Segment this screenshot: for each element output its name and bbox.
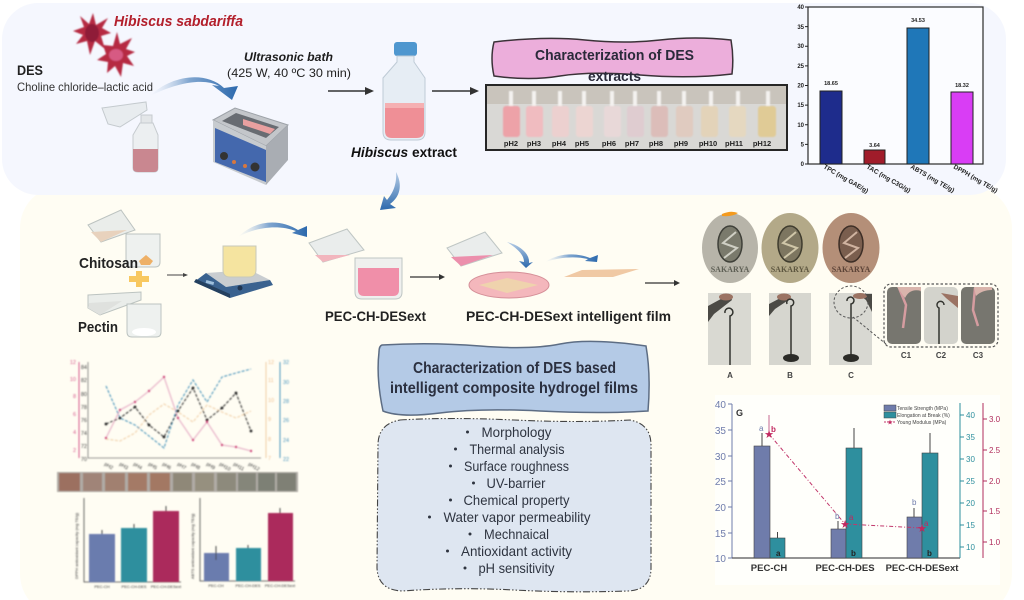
series: blue	[106, 369, 251, 448]
line chart: colour parameters across pH: pH9	[205, 462, 216, 471]
label: A: A	[727, 371, 733, 380]
bar chart: TPC, TAC, ABTS and DPPH: 35	[797, 25, 805, 31]
photo: extract vials at pH 2 to 12: pH3	[527, 139, 541, 148]
bar chart: mechanical properties: ★	[764, 429, 774, 441]
photo: extract vials at pH 2 to 12: pH10	[699, 139, 717, 148]
significance letters: a	[849, 513, 854, 522]
line chart: colour parameters across pH: 12	[70, 360, 76, 366]
bar chart: TPC, TAC, ABTS and DPPH: ABTS (mg TE/g)	[909, 164, 955, 194]
bar chart: mechanical properties: 40	[966, 411, 975, 420]
significance letters: a	[776, 549, 781, 558]
bar chart: mechanical properties: 20	[966, 499, 975, 508]
bar: TAC	[864, 150, 885, 164]
arrow: bath to extract	[328, 87, 374, 95]
icon: pouring into petri dish	[447, 232, 549, 298]
line chart: colour parameters across pH: 2	[73, 448, 76, 454]
bar chart: mechanical properties: 15	[715, 529, 726, 540]
bar chart: mechanical properties: ★	[840, 519, 850, 531]
film: PEC-CH-DES	[762, 213, 818, 283]
bar chart: TPC, TAC, ABTS and DPPH: 15	[797, 103, 805, 109]
bar chart: mechanical properties: 1.0	[989, 538, 1001, 547]
bar chart: TPC, TAC, ABTS and DPPH: 10	[797, 123, 805, 129]
arrow: DES to ultrasonic bath	[150, 77, 238, 100]
test photo A	[708, 293, 751, 365]
legend: ★	[887, 418, 893, 426]
bar: PEC-CH-DESext	[153, 511, 179, 582]
arrow: stirrer to pink beaker	[238, 223, 307, 237]
bar chart: mechanical properties	[715, 395, 1001, 585]
icon: pouring extract into beaker	[309, 229, 402, 299]
line chart: colour parameters across pH: pH7	[176, 462, 187, 471]
photo: extract vials at pH 2 to 12	[486, 85, 787, 150]
bar chart: mechanical properties: 10	[715, 554, 726, 565]
list item: chemical property: Chemical property	[464, 492, 570, 508]
label: C: C	[848, 371, 854, 380]
x-axis labels: PEC-CH-DES	[815, 563, 875, 574]
heading: characterization of DES based films	[378, 341, 649, 415]
line chart: colour parameters across pH: 26	[283, 418, 289, 424]
legend: Young Modulus (MPa)	[897, 420, 947, 426]
line chart: colour parameters across pH: pH6	[161, 462, 172, 471]
bar chart: DPPH antioxidant capacity: PEC-CH-DESext	[151, 584, 182, 589]
icon: pectin beakers	[88, 292, 161, 337]
panel letter G: G	[736, 408, 743, 418]
line chart: colour parameters across pH: 76	[81, 418, 87, 424]
label: C3: C3	[973, 351, 984, 360]
bar: PEC-CH	[89, 534, 115, 582]
line chart: colour parameters across pH: 84	[81, 365, 87, 371]
bar chart: ABTS antioxidant capacity	[190, 498, 296, 588]
bar chart: mechanical properties: 20	[715, 503, 726, 514]
heading: characterization of DES extracts: extracts	[588, 68, 641, 84]
film: PEC-CH: SAKARYA	[711, 265, 749, 274]
bar chart: mechanical properties: 25	[966, 477, 975, 486]
icon: hibiscus extract bottle	[383, 42, 425, 140]
bar chart: DPPH antioxidant capacity	[74, 498, 182, 589]
bar chart: TPC, TAC, ABTS and DPPH: 25	[797, 64, 805, 70]
bar chart: mechanical properties: 1.5	[989, 507, 1001, 516]
bar chart: mechanical properties: 2.5	[989, 446, 1001, 455]
bar chart: TPC, TAC, ABTS and DPPH: 5	[801, 142, 805, 148]
significance letters: b	[851, 549, 856, 558]
line chart: colour parameters across pH: 7	[268, 456, 271, 462]
significance letters: a	[759, 424, 764, 433]
list item: UV-barrier: UV-barrier	[486, 475, 546, 491]
line chart: colour parameters across pH: pH11	[232, 462, 245, 473]
photo C3	[961, 287, 995, 344]
arrow: dish to film	[545, 254, 598, 262]
list item: thermal analysis: Thermal analysis	[470, 441, 564, 457]
bar chart: ABTS antioxidant capacity: PEC-CH-DES	[236, 583, 261, 588]
bars: elongation at break	[770, 448, 938, 558]
bars: tensile strength	[754, 446, 922, 558]
icon: chitosan beakers	[88, 210, 160, 267]
line chart: colour parameters across pH: 32	[283, 360, 289, 366]
line chart: colour parameters across pH: 10	[70, 377, 76, 383]
line chart: colour parameters across pH: 12	[268, 360, 274, 366]
line chart: colour parameters across pH: pH5	[147, 462, 158, 471]
significance letters: b	[912, 498, 917, 507]
photo: extract vials at pH 2 to 12: pH7	[625, 139, 639, 148]
legend	[884, 405, 950, 426]
panel: DES extraction	[2, 3, 1006, 195]
x-axis labels: PEC-CH	[751, 563, 787, 574]
bar chart: mechanical properties: 35	[715, 426, 726, 437]
bar chart: TPC, TAC, ABTS and DPPH: 30	[797, 44, 805, 50]
series: black	[106, 388, 251, 437]
list item: morphology: Morphology	[482, 424, 552, 440]
heading: characterization of DES based films: intelligent composite hydrogel films	[390, 380, 638, 397]
bar chart: mechanical properties: 30	[966, 455, 975, 464]
bar chart: mechanical properties: 10	[966, 543, 975, 552]
x-axis labels	[751, 563, 959, 574]
bar chart: DPPH antioxidant capacity: DPPH antioxidant capacity (mg TE/g)	[74, 512, 79, 579]
bar chart: TPC, TAC, ABTS and DPPH: TPC (mg GAE/g)	[822, 164, 869, 195]
photo: extract vials at pH 2 to 12: pH4	[552, 139, 567, 148]
bar: PEC-CH-DES	[236, 548, 261, 581]
line chart: colour parameters across pH: 22	[283, 457, 289, 463]
icon: magnetic stirrer with beaker	[194, 246, 273, 298]
label: ultrasonic conditions: (425 W, 40 ºC 30 min)	[227, 66, 351, 80]
photo: extract vials at pH 2 to 12: pH11	[725, 139, 743, 148]
bar chart: ABTS antioxidant capacity: PEC-CH	[208, 583, 224, 588]
significance letters	[759, 424, 932, 558]
bar chart: mechanical properties: 15	[966, 521, 975, 530]
bar chart: TPC, TAC, ABTS and DPPH: TAC (mg C3G/g)	[865, 164, 912, 195]
bar chart: TPC, TAC, ABTS and DPPH: 18.32	[955, 83, 969, 89]
series: orange	[106, 404, 251, 441]
film: PEC-CH	[702, 212, 758, 283]
bar chart: ABTS antioxidant capacity: PEC-CH-DESext	[265, 583, 296, 588]
label: DES: DES	[17, 62, 43, 78]
label: pectin: Pectin	[78, 319, 118, 336]
photo: extract vials at pH 2 to 12: pH6	[602, 139, 616, 148]
line chart: colour parameters across pH: 10	[268, 398, 274, 404]
photo: extract vials at pH 2 to 12: pH12	[753, 139, 771, 148]
bar chart: mechanical properties: 3.0	[989, 415, 1001, 424]
bar chart: mechanical properties: ★	[917, 523, 927, 535]
list item: surface roughness: Surface roughness	[464, 458, 569, 474]
arrow: extract to film preparation	[380, 172, 400, 210]
panel: list of characterizations	[377, 418, 651, 592]
list item: water vapor permeability: Water vapor permeability	[444, 509, 590, 525]
photos: film strength tests A, B, C	[708, 293, 872, 380]
line chart: colour parameters across pH: 72	[81, 444, 87, 450]
line chart: colour parameters across pH: 8	[73, 394, 76, 400]
label: Hibiscus sabdariffa: Hibiscus sabdariffa	[114, 13, 243, 30]
label: B: B	[787, 371, 793, 380]
bar chart: TPC, TAC, ABTS and DPPH: 34.53	[911, 18, 925, 24]
label: PEC-CH-DESext: PEC-CH-DESext	[325, 308, 426, 324]
photo strip: film colours	[57, 472, 298, 492]
test photo C	[829, 293, 872, 365]
label: choline chloride lactic acid: Choline chloride–lactic acid	[17, 80, 153, 94]
photo C1	[887, 287, 921, 344]
list item: pH sensitivity: pH sensitivity	[478, 560, 554, 576]
line chart: colour parameters across pH: pH3	[118, 462, 129, 471]
photo C2	[924, 287, 958, 344]
bar: DPPH	[951, 92, 973, 164]
bar: ABTS	[907, 28, 929, 164]
line: Young modulus	[769, 434, 922, 528]
label: intelligent film: PEC-CH-DESext intelligent film	[466, 308, 671, 324]
film: PEC-CH-DESext: SAKARYA	[832, 265, 870, 274]
heading: characterization of DES extracts	[492, 38, 733, 84]
line chart: colour parameters across pH: 11	[268, 378, 274, 384]
line chart: colour parameters across pH: 82	[81, 378, 87, 384]
bar chart: TPC, TAC, ABTS and DPPH: 18.65	[824, 81, 838, 87]
line chart: colour parameters across pH: 9	[268, 417, 271, 423]
line chart: colour parameters across pH: 8	[268, 437, 271, 443]
line chart: colour parameters across pH: 4	[73, 430, 76, 436]
line chart: colour parameters across pH: 30	[283, 380, 289, 386]
heading: characterization of DES based films: Characterization of DES based	[413, 360, 616, 377]
label: ultrasonic bath: Ultrasonic bath	[244, 50, 333, 64]
icon: peeled film	[564, 269, 639, 277]
bar chart: ABTS antioxidant capacity: ABTS antioxidant capacity (mg TE/g)	[190, 513, 195, 579]
bar chart: mechanical properties: 40	[715, 400, 726, 411]
icon: hibiscus calyces	[73, 13, 135, 77]
panel: film preparation and characterization	[20, 186, 1012, 600]
bar: TPC	[820, 91, 842, 164]
arrow: film to photos	[645, 280, 680, 286]
photo: extract vials at pH 2 to 12: pH5	[575, 139, 589, 148]
line chart: colour parameters across pH: pH4	[132, 462, 143, 471]
list item: mechanical: Mechnaical	[484, 526, 549, 542]
line chart: colour parameters across pH: 6	[73, 412, 76, 418]
line chart: colour parameters across pH	[70, 360, 289, 473]
bar chart: TPC, TAC, ABTS and DPPH: 20	[797, 84, 805, 90]
x-axis labels: PEC-CH-DESext	[886, 563, 959, 574]
label: C2: C2	[936, 351, 947, 360]
significance letters: b	[927, 549, 932, 558]
line chart: colour parameters across pH: 80	[81, 392, 87, 398]
legend: Tensile Strength (MPa)	[897, 406, 948, 412]
label: chitosan: Chitosan	[79, 255, 138, 272]
photo: extract vials at pH 2 to 12: pH2	[504, 139, 518, 148]
series: pink	[106, 377, 251, 451]
bar chart: TPC, TAC, ABTS and DPPH: 3.64	[869, 143, 881, 149]
line chart: colour parameters across pH: 78	[81, 405, 87, 411]
significance letters: b	[771, 425, 776, 434]
bar chart: TPC, TAC, ABTS and DPPH: 40	[797, 5, 805, 11]
callout: zoomed details C1 to C3	[834, 284, 998, 360]
film: PEC-CH-DESext	[822, 213, 880, 283]
bar: PEC-CH-DESext	[268, 513, 293, 581]
line chart: colour parameters across pH: pH10	[218, 462, 232, 473]
arrow: extract to characterization	[432, 87, 479, 95]
photo: extract vials at pH 2 to 12: pH9	[674, 139, 688, 148]
line chart: colour parameters across pH: 28	[283, 399, 289, 405]
icon: plus sign	[129, 271, 149, 287]
bar: PEC-CH-DES	[121, 528, 147, 582]
icon: ultrasonic bath	[213, 108, 288, 185]
significance letters: b	[835, 512, 840, 521]
label: C1: C1	[901, 351, 912, 360]
line chart: colour parameters across pH: 24	[283, 438, 289, 444]
line chart: colour parameters across pH: 74	[81, 431, 87, 437]
icon: flask pouring into bottle	[102, 102, 158, 172]
film: PEC-CH-DES: SAKARYA	[771, 265, 809, 274]
photo: extract vials at pH 2 to 12: pH8	[649, 139, 663, 148]
bar chart: DPPH antioxidant capacity: PEC-CH-DES	[122, 584, 147, 589]
significance letters: a	[924, 519, 929, 528]
label: hibiscus extract: Hibiscus extract	[351, 144, 457, 160]
arrow: mixing	[167, 273, 188, 277]
test photo B	[769, 293, 811, 365]
bar chart: TPC, TAC, ABTS and DPPH: DPPH (mg TE/g)	[952, 164, 999, 195]
list item: antioxidant activity: Antioxidant activity	[461, 543, 572, 559]
bar: PEC-CH	[204, 553, 229, 581]
line chart: colour parameters across pH: pH12	[247, 462, 261, 473]
bar chart: mechanical properties: 30	[715, 452, 726, 463]
line chart: colour parameters across pH: pH8	[190, 462, 201, 471]
bar chart: mechanical properties: 25	[715, 477, 726, 488]
line chart: colour parameters across pH: pH2	[103, 462, 114, 471]
arrow: to casting	[410, 274, 445, 280]
heading: characterization of DES extracts: Characterization of DES	[535, 47, 694, 64]
legend: Elongation at Break (%)	[897, 413, 950, 419]
photos: film transparency over logo	[702, 212, 880, 283]
bar chart: mechanical properties: 2.0	[989, 477, 1001, 486]
line chart: colour parameters across pH: 70	[81, 457, 87, 463]
bar chart: DPPH antioxidant capacity: PEC-CH	[94, 584, 110, 589]
bar chart: mechanical properties: 35	[966, 433, 975, 442]
bar chart: TPC, TAC, ABTS and DPPH	[797, 5, 999, 195]
bar chart: TPC, TAC, ABTS and DPPH: 0	[801, 162, 805, 168]
